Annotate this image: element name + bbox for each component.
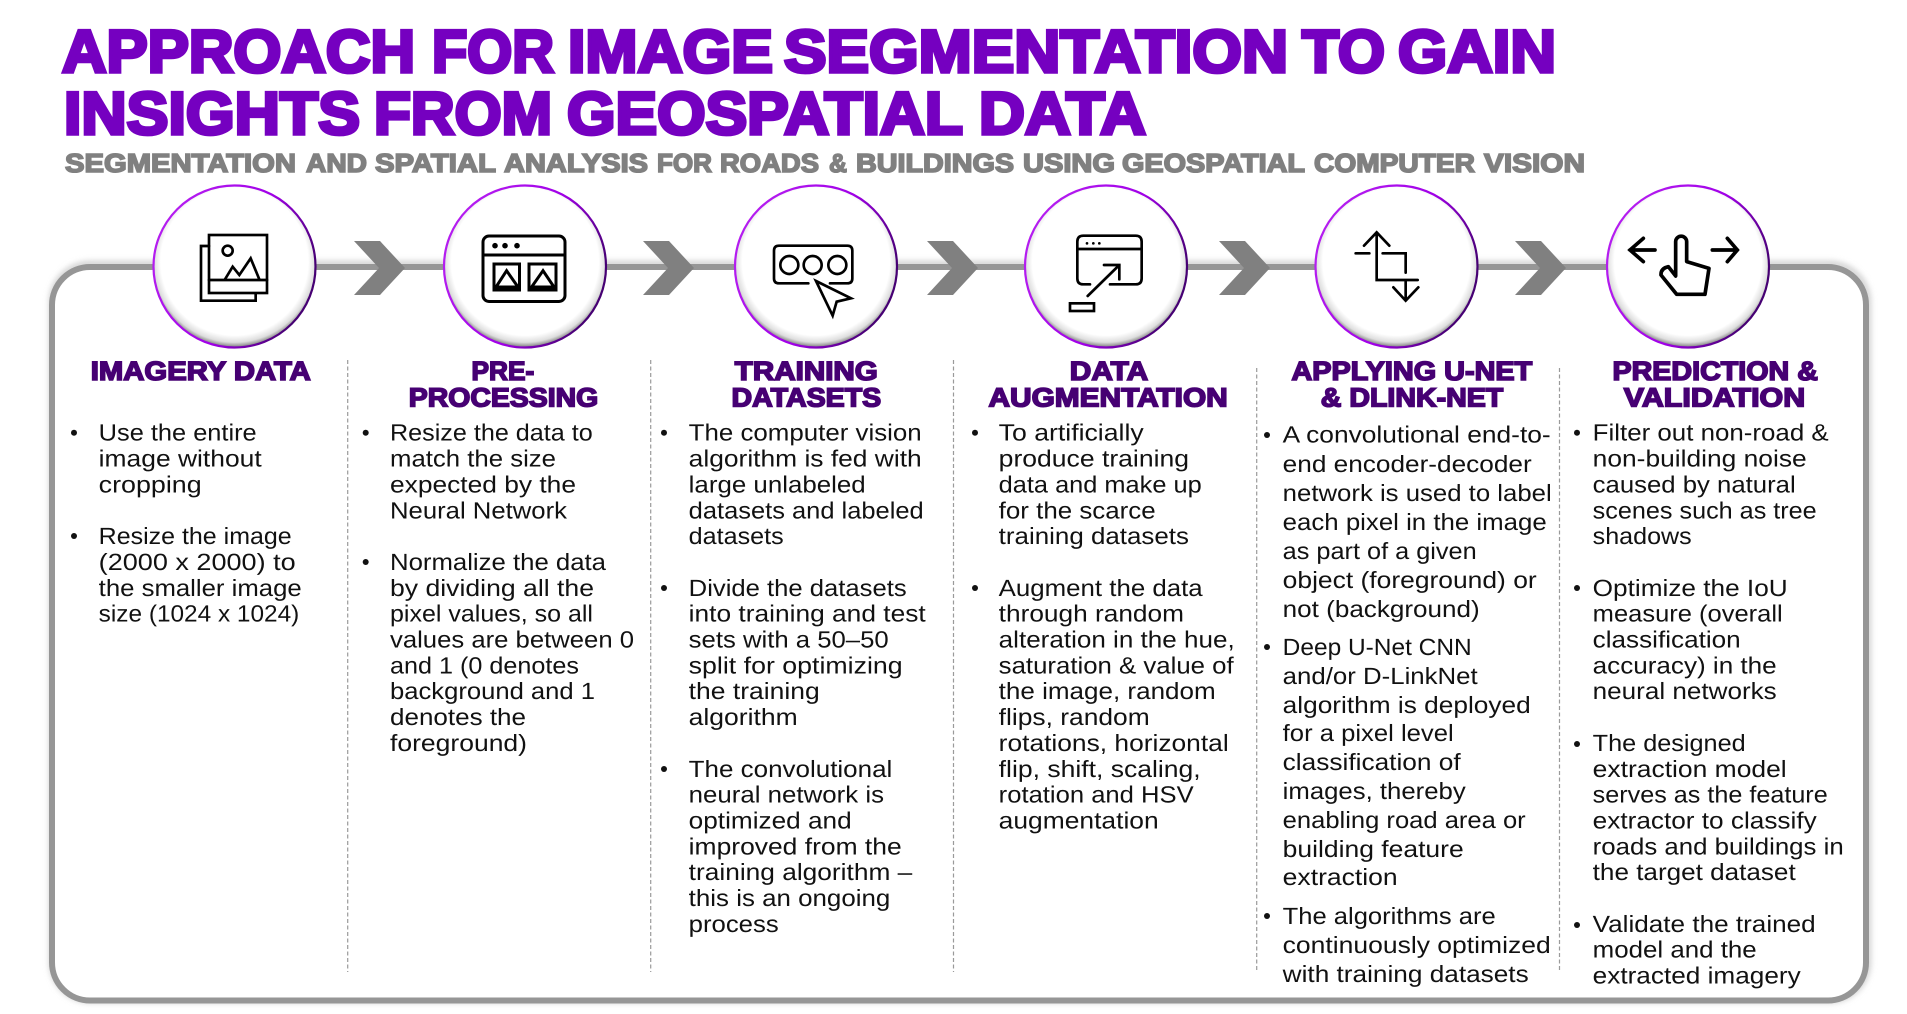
text block: imagery data bullets: Use the entire	[99, 420, 257, 446]
text block: training datasets bullets: training algorithm –	[689, 859, 913, 885]
text block: u-net bullets: for a pixel level	[1283, 720, 1454, 746]
panel: applying u-net and dlink-net	[1264, 356, 1552, 987]
title: GEOSPATIAL	[567, 80, 963, 147]
text block: training datasets bullets	[661, 420, 926, 937]
text block: imagery data bullets: cropping	[99, 471, 202, 497]
text block: training datasets bullets: the training	[689, 678, 820, 704]
text block: u-net bullets: enabling road area or	[1283, 807, 1526, 833]
text block: prediction bullets: roads and buildings in	[1593, 833, 1844, 859]
heading: training datasets: TRAINING	[735, 356, 878, 386]
text block: u-net bullets: algorithm is deployed	[1283, 692, 1531, 718]
text block: u-net bullets: Deep U-Net CNN	[1283, 634, 1472, 660]
heading: pre-processing: PRE-	[472, 356, 534, 386]
text block: imagery data bullets: (2000 x 2000) to	[99, 549, 296, 575]
text block: prediction bullets: classification	[1593, 626, 1741, 652]
heading: applying u-net and dlink-net: & DLINK-NET	[1321, 383, 1503, 413]
heading: prediction and validation: VALIDATION	[1624, 383, 1805, 413]
text block: training datasets bullets: improved from the	[689, 833, 902, 859]
text block: prediction bullets: neural networks	[1593, 678, 1777, 704]
text block: training datasets bullets: algorithm	[689, 704, 798, 730]
text block: u-net bullets: with training datasets	[1282, 961, 1529, 987]
text block: training datasets bullets: algorithm is fed with	[689, 446, 922, 472]
text block: u-net bullets: continuously optimized	[1283, 932, 1551, 958]
heading: training datasets	[732, 356, 881, 413]
text block: data augmentation bullets: data and make up	[999, 471, 1202, 497]
subtitle: &	[829, 148, 847, 178]
panel: pre-processing	[363, 356, 634, 756]
text block: u-net bullets: as part of a given	[1283, 538, 1477, 564]
text block: u-net bullets: building feature	[1283, 836, 1464, 862]
text block: prediction bullets: serves as the feature	[1593, 782, 1828, 808]
text block: pre-processing bullets: values are between 0	[390, 626, 634, 652]
text block: u-net bullets: network is used to label	[1283, 480, 1552, 506]
icon: training datasets circle	[735, 186, 897, 348]
subtitle: FOR	[657, 148, 712, 178]
subtitle: VISION	[1484, 148, 1585, 178]
heading: prediction and validation: PREDICTION &	[1612, 356, 1818, 386]
text block: pre-processing bullets: expected by the	[390, 471, 576, 497]
heading: imagery data: IMAGERY DATA	[91, 356, 311, 386]
arrow: chevron 3	[927, 241, 978, 295]
text block: u-net bullets: and/or D-LinkNet	[1283, 663, 1478, 689]
text block: prediction bullets: caused by natural	[1593, 471, 1796, 497]
text block: prediction bullets: shadows	[1593, 523, 1692, 549]
icon: pre-processing circle	[444, 186, 606, 348]
subtitle	[65, 148, 1585, 178]
heading: data augmentation: DATA	[1070, 356, 1148, 386]
text block: data augmentation bullets: training datasets	[999, 523, 1189, 549]
text block: prediction bullets: measure (overall	[1593, 601, 1783, 627]
text block: prediction bullets: Validate the trained	[1593, 911, 1816, 937]
text block: imagery data bullets	[71, 420, 302, 627]
text block: u-net bullets: each pixel in the image	[1283, 509, 1547, 535]
subtitle: SPATIAL	[375, 148, 496, 178]
text block: prediction bullets: model and the	[1593, 937, 1757, 963]
panel: prediction and validation	[1574, 356, 1844, 989]
text block: u-net bullets: extraction	[1283, 864, 1398, 890]
title: APPROACH	[62, 18, 415, 85]
panel: imagery data	[71, 356, 311, 627]
text block: data augmentation bullets: the image, random	[999, 678, 1216, 704]
text block: prediction bullets: Filter out non-road &	[1593, 420, 1829, 446]
text block: prediction bullets: extracted imagery	[1593, 963, 1801, 989]
text block: prediction bullets: scenes such as tree	[1593, 497, 1817, 523]
text block: training datasets bullets: The computer vision	[689, 420, 922, 446]
text block: pre-processing bullets: Neural Network	[390, 497, 567, 523]
text block: data augmentation bullets: saturation & value of	[999, 652, 1234, 678]
text block: pre-processing bullets: background and 1	[390, 678, 595, 704]
text block: training datasets bullets: process	[689, 911, 779, 937]
text block: pre-processing bullets	[363, 420, 634, 756]
text block: data augmentation bullets: produce training	[999, 446, 1189, 472]
text block: training datasets bullets: datasets and labeled	[689, 497, 924, 523]
text block: imagery data bullets: Resize the image	[99, 523, 292, 549]
icon: imagery data circle	[154, 186, 316, 348]
text block: prediction bullets: Optimize the IoU	[1593, 575, 1788, 601]
heading: prediction and validation	[1612, 356, 1818, 413]
heading: applying u-net and dlink-net: APPLYING U-NET	[1292, 356, 1532, 386]
text block: pre-processing bullets: match the size	[390, 446, 556, 472]
heading: data augmentation	[988, 356, 1228, 413]
title: IMAGE	[568, 18, 773, 85]
heading: applying u-net and dlink-net	[1292, 356, 1532, 413]
heading: training datasets: DATASETS	[732, 383, 881, 413]
icon: prediction circle	[1607, 186, 1769, 348]
text block: training datasets bullets: sets with a 50–50	[689, 626, 889, 652]
text block: imagery data bullets: size (1024 x 1024)	[99, 601, 299, 627]
panel: training datasets	[661, 356, 926, 937]
text block: u-net bullets: not (background)	[1283, 596, 1480, 622]
title: FROM	[374, 80, 552, 147]
text block: data augmentation bullets: rotations, horizontal	[999, 730, 1229, 756]
text block: pre-processing bullets: foreground)	[390, 730, 527, 756]
text block: data augmentation bullets: rotation and HSV	[999, 782, 1194, 808]
text block: data augmentation bullets: alteration in the hue,	[999, 626, 1235, 652]
text block: training datasets bullets: this is an ongoing	[689, 885, 890, 911]
title: TO	[1302, 18, 1385, 85]
text block: prediction bullets: The designed	[1593, 730, 1746, 756]
text block: data augmentation bullets: flips, random	[999, 704, 1150, 730]
text block: prediction bullets: the target dataset	[1593, 859, 1796, 885]
heading: pre-processing	[409, 356, 598, 413]
text block: imagery data bullets: image without	[99, 446, 262, 472]
text block: pre-processing bullets: denotes the	[390, 704, 526, 730]
subtitle: SEGMENTATION	[65, 148, 296, 178]
arrow: chevron 5	[1515, 241, 1566, 295]
subtitle: BUILDINGS	[856, 148, 1014, 178]
subtitle: ROADS	[720, 148, 819, 178]
text block: u-net bullets: classification of	[1283, 749, 1461, 775]
text block: prediction bullets: extractor to classify	[1593, 808, 1817, 834]
text block: pre-processing bullets: pixel values, so all	[390, 601, 593, 627]
text block: training datasets bullets: neural network is	[689, 782, 884, 808]
dashed column dividers	[348, 360, 1560, 972]
subtitle: ANALYSIS	[504, 148, 648, 178]
arrow: chevron 4	[1219, 241, 1270, 295]
panel: rounded process frame	[52, 264, 1868, 1000]
text block: prediction bullets: non-building noise	[1593, 446, 1807, 472]
text block: u-net bullets: object (foreground) or	[1283, 567, 1537, 593]
text block: data augmentation bullets: flip, shift, scaling,	[999, 756, 1201, 782]
heading: pre-processing: PROCESSING	[409, 383, 598, 413]
text block: data augmentation bullets	[972, 420, 1235, 834]
title: INSIGHTS	[64, 80, 360, 147]
text block: training datasets bullets: datasets	[689, 523, 784, 549]
text block: pre-processing bullets: and 1 (0 denotes	[390, 652, 579, 678]
subtitle: AND	[306, 148, 367, 178]
panel: data augmentation	[972, 356, 1235, 834]
text block: training datasets bullets: into training and test	[689, 601, 926, 627]
text block: data augmentation bullets: through random	[999, 601, 1184, 627]
subtitle: USING	[1023, 148, 1115, 178]
text block: training datasets bullets: split for optimizing	[689, 652, 903, 678]
title	[62, 18, 1556, 147]
title: DATA	[979, 80, 1146, 147]
text block: u-net bullets	[1264, 422, 1552, 987]
text block: data augmentation bullets: for the scarce	[999, 497, 1156, 523]
subtitle: COMPUTER	[1314, 148, 1475, 178]
text block: u-net bullets: images, thereby	[1283, 778, 1466, 804]
text block: data augmentation bullets: To artificially	[999, 420, 1144, 446]
text block: u-net bullets: end encoder-decoder	[1283, 451, 1532, 477]
text block: u-net bullets: A convolutional end-to-	[1283, 422, 1551, 448]
arrow: chevron 1	[354, 241, 405, 295]
text block: u-net bullets: The algorithms are	[1283, 903, 1496, 929]
text block: training datasets bullets: The convolutional	[689, 756, 892, 782]
title: SEGMENTATION	[784, 18, 1288, 85]
heading: data augmentation: AUGMENTATION	[988, 383, 1228, 413]
text block: training datasets bullets: Divide the datasets	[689, 575, 907, 601]
text block: data augmentation bullets: Augment the data	[999, 575, 1204, 601]
title: GAIN	[1398, 18, 1556, 85]
text block: training datasets bullets: optimized and	[689, 808, 852, 834]
text block: prediction bullets: extraction model	[1593, 756, 1787, 782]
title: FOR	[432, 18, 554, 85]
text block: training datasets bullets: large unlabeled	[689, 471, 866, 497]
text block: prediction bullets	[1574, 420, 1844, 989]
icon: u-net circle	[1316, 186, 1478, 348]
icon: data augmentation circle	[1025, 186, 1187, 348]
text block: pre-processing bullets: Resize the data to	[390, 420, 593, 446]
text block: pre-processing bullets: by dividing all the	[390, 575, 594, 601]
text block: pre-processing bullets: Normalize the data	[390, 549, 607, 575]
arrow: chevron 2	[643, 241, 694, 295]
text block: imagery data bullets: the smaller image	[99, 575, 302, 601]
text block: data augmentation bullets: augmentation	[999, 808, 1159, 834]
text block: prediction bullets: accuracy) in the	[1593, 652, 1777, 678]
subtitle: GEOSPATIAL	[1122, 148, 1305, 178]
